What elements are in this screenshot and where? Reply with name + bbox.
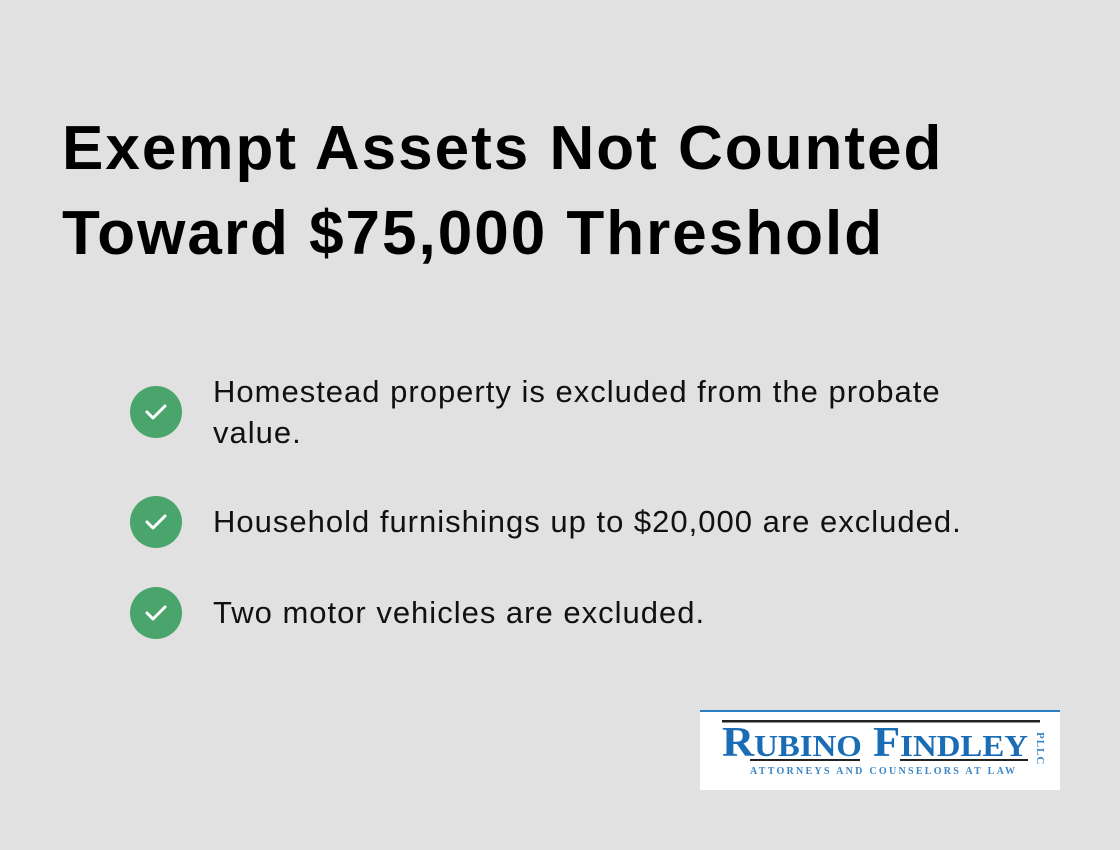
icon: check: [130, 496, 182, 548]
logo: RUBINO FINDLEY: [722, 720, 1028, 766]
title: Toward $75,000 Threshold: [62, 199, 884, 268]
text 2: Household furnishings up to $20,000 are excluded.: [213, 504, 962, 539]
text 3: Two motor vehicles are excluded.: [213, 595, 705, 630]
logo: [700, 710, 1060, 790]
title: [62, 114, 943, 268]
item 3: [130, 587, 705, 639]
title: Exempt Assets Not Counted: [62, 114, 943, 183]
icon: check: [130, 386, 182, 438]
logo: PLLC: [1034, 732, 1046, 765]
text 1: Homestead property is excluded from the probate value.: [213, 374, 941, 450]
icon: check: [130, 587, 182, 639]
item 1: [130, 374, 941, 450]
logo: ATTORNEYS AND COUNSELORS AT LAW: [750, 766, 1015, 777]
item 2: [130, 496, 962, 548]
